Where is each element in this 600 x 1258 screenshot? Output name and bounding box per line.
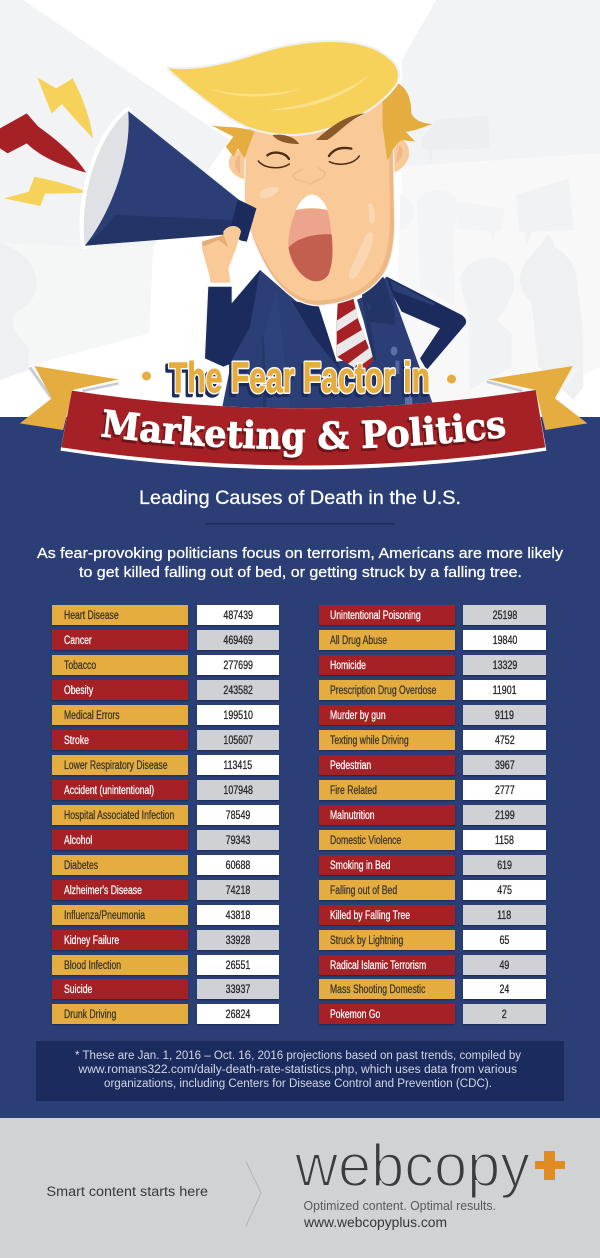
row: Medical Errors: Medical Errors: [64, 710, 120, 722]
row: Smoking in Bed: 619: [497, 860, 512, 872]
row: Kidney Failure: [52, 930, 280, 952]
row: Accident: Accident (unintentional): [64, 785, 154, 797]
row: Drunk Driving: Drunk Driving: [64, 1009, 116, 1021]
row: Homicide: Homicide: [330, 660, 366, 672]
row: Falling out of Bed: 475: [497, 885, 512, 897]
row: Lower Respiratory Disease: 113415: [224, 760, 252, 772]
row: Pokemon Go: 2: [502, 1009, 507, 1021]
right ribbon tail: [487, 366, 587, 430]
row: Influenza/Pneumonia: Influenza/Pneumonia: [64, 910, 145, 922]
footer tagline: Smart content starts here: [46, 1184, 208, 1199]
row: Heart Disease: Heart Disease: [64, 610, 119, 622]
hand gripping megaphone: [202, 226, 241, 287]
row: Texting while Driving: [318, 730, 546, 752]
footnote box: * These are Jan. 1, 2016 – Oct. 16, 2016 projections based on past trends, compiled by: [75, 1050, 521, 1062]
title: Marketing & Politics: Marketing & Politics: [99, 411, 504, 460]
row: Cancer: 469469: [223, 635, 253, 647]
row: Alzheimer's Disease: [52, 880, 280, 902]
row: Alzheimer's Disease: 74218: [226, 885, 250, 897]
footnote box: [36, 1041, 564, 1101]
row: Influenza/Pneumonia: 43818: [226, 910, 250, 922]
row: Killed by Falling Tree: Killed by Falling Tree: [330, 910, 410, 922]
row: Texting while Driving: 4752: [495, 735, 514, 747]
row: Domestic Violence: 1158: [495, 835, 514, 847]
row: Hospital Associated Infection: Hospital Associated Infection: [64, 810, 174, 822]
subtitle: Leading Causes of Death in the U.S.: [139, 488, 461, 509]
row: Smoking in Bed: [318, 855, 546, 876]
footer chevron: [246, 1162, 261, 1226]
face highlights: [368, 203, 375, 224]
row: Diabetes: Diabetes: [64, 860, 98, 872]
row: Kidney Failure: Kidney Failure: [64, 935, 119, 947]
row: Tobacco: Tobacco: [64, 660, 96, 672]
title: The Fear Factor in: The Fear Factor in: [166, 357, 428, 405]
row: Killed by Falling Tree: 118: [497, 910, 512, 922]
row: Accident: 107948: [223, 785, 253, 797]
row: Medical Errors: 199510: [223, 710, 253, 722]
open mouth: [288, 194, 333, 281]
footer panel: [0, 1118, 600, 1258]
left ribbon tail: [20, 366, 119, 430]
decorative title dots: [142, 372, 456, 384]
row: Alcohol: 79343: [226, 835, 250, 847]
row: Pedestrian: 3967: [495, 760, 514, 772]
row: All Drug Abuse: All Drug Abuse: [330, 635, 387, 647]
row: Domestic Violence: [318, 830, 546, 852]
row: Stroke: 105607: [223, 735, 253, 747]
row: Heart Disease: [52, 605, 280, 626]
row: Obesity: Obesity: [64, 685, 93, 697]
row: Obesity: [52, 680, 280, 702]
row: Pedestrian: Pedestrian: [330, 760, 371, 772]
navy panel: [0, 417, 600, 1119]
row: Murder by gun: [318, 705, 546, 726]
icon: lightning bolts: [0, 77, 93, 206]
row: Lower Respiratory Disease: Lower Respiratory Disease: [64, 760, 168, 772]
row: Texting while Driving: Texting while Driving: [330, 735, 409, 747]
row: Pokemon Go: Pokemon Go: [330, 1009, 380, 1021]
row: Blood Infection: Blood Infection: [64, 960, 121, 972]
title: The Fear Factor in: The Fear Factor in: [169, 354, 430, 402]
row: Unintentional Poisoning: Unintentional Poisoning: [330, 610, 421, 622]
footnote box: organizations, including Centers for Disease Control and Prevention (CDC).: [104, 1078, 492, 1090]
row: Unintentional Poisoning: [318, 605, 546, 626]
title: The Fear Factor in: [166, 354, 430, 405]
row: Homicide: 13329: [492, 660, 517, 672]
logo: webcopy plus: webcopy: [294, 1132, 530, 1199]
row: Struck by Lightning: 65: [500, 935, 509, 947]
row: Cancer: [52, 630, 280, 652]
row: Unintentional Poisoning: 25198: [492, 610, 517, 622]
row: Kidney Failure: 33928: [226, 935, 250, 947]
title: Marketing & Politics: Marketing & Politics: [101, 409, 506, 458]
row: Alcohol: [52, 830, 280, 852]
row: Blood Infection: 26551: [226, 960, 250, 972]
row: Prescription Drug Overdose: 11901: [493, 685, 516, 697]
row: Cancer: Cancer: [64, 635, 92, 647]
row: Obesity: 243582: [223, 685, 253, 697]
row: Killed by Falling Tree: [318, 905, 546, 926]
intro paragraph: As fear-provoking politicians focus on terrorism, Americans are more likely: [37, 545, 564, 562]
row: Suicide: Suicide: [64, 984, 92, 996]
row: Smoking in Bed: Smoking in Bed: [330, 860, 390, 872]
hair: [168, 42, 432, 160]
row: Lower Respiratory Disease: [52, 755, 280, 776]
row: Drunk Driving: 26824: [226, 1009, 250, 1021]
row: Diabetes: 60688: [226, 860, 250, 872]
row: Domestic Violence: Domestic Violence: [330, 835, 401, 847]
row: Radical Islamic Terrorism: [318, 955, 546, 976]
row: Homicide: [318, 655, 546, 676]
row: All Drug Abuse: 19840: [492, 635, 517, 647]
row: Alcohol: Alcohol: [64, 835, 92, 847]
row: Murder by gun: 9119: [495, 710, 514, 722]
row: Falling out of Bed: [318, 880, 546, 902]
row: Stroke: [52, 730, 280, 752]
row: Medical Errors: [52, 705, 280, 726]
closed eyes: [258, 148, 359, 168]
row: Tobacco: 277699: [223, 660, 253, 672]
row: Accident: [52, 780, 280, 802]
row: Hospital Associated Infection: 78549: [226, 810, 250, 822]
row: Stroke: Stroke: [64, 735, 89, 747]
crowd silhouettes: [400, 115, 583, 400]
row: Mass Shooting Domestic: Mass Shooting Domestic: [330, 984, 425, 996]
row: All Drug Abuse: [318, 630, 546, 652]
character: suit: [205, 270, 466, 410]
intro paragraph: to get killed falling out of bed, or getting struck by a falling tree.: [79, 564, 522, 581]
row: Drunk Driving: [52, 1004, 280, 1026]
background scene: [0, 0, 600, 420]
row: Malnutrition: 2199: [495, 810, 514, 822]
title: The Fear Factor in: The Fear Factor in: [169, 354, 430, 402]
row: Pedestrian: [318, 755, 546, 776]
row: Pokemon Go: [318, 1004, 546, 1026]
red ribbon: [60, 390, 546, 469]
nose: [293, 167, 325, 184]
row: Falling out of Bed: Falling out of Bed: [330, 885, 397, 897]
row: Radical Islamic Terrorism: Radical Islamic Terrorism: [330, 960, 426, 972]
row: Alzheimer's Disease: Alzheimer's Disease: [64, 885, 142, 897]
character: ears and head: [229, 87, 409, 305]
banner ribbon: [20, 366, 587, 469]
row: Prescription Drug Overdose: [318, 680, 546, 702]
logo tagline: Optimized content. Optimal results.: [304, 1198, 496, 1213]
row: Suicide: 33937: [226, 984, 250, 996]
row: Influenza/Pneumonia: [52, 905, 280, 926]
row: Mass Shooting Domestic: [318, 979, 546, 1000]
row: Mass Shooting Domestic: 24: [500, 984, 509, 996]
eyebrows: [272, 135, 299, 144]
row: Fire Related: 2777: [495, 785, 514, 797]
shirt: [318, 293, 373, 362]
row: Diabetes: [52, 855, 280, 876]
row: Struck by Lightning: [318, 930, 546, 952]
icon: megaphone: [84, 111, 256, 246]
row: Tobacco: [52, 655, 280, 676]
row: Fire Related: [318, 780, 546, 802]
row: Struck by Lightning: Struck by Lightning: [330, 935, 403, 947]
row: Fire Related: Fire Related: [330, 785, 377, 797]
row: Murder by gun: Murder by gun: [330, 710, 386, 722]
row: Malnutrition: Malnutrition: [330, 810, 375, 822]
cheek: [259, 187, 279, 199]
intro paragraph: [37, 545, 564, 581]
row: Blood Infection: [52, 955, 280, 976]
row: Malnutrition: [318, 805, 546, 826]
row: Heart Disease: 487439: [223, 610, 253, 622]
row: Hospital Associated Infection: [52, 805, 280, 826]
footnote box: www.romans322.com/daily-death-rate-statistics.php, which uses data from various: [77, 1064, 517, 1076]
logo url: www.webcopyplus.com: [303, 1215, 447, 1230]
row: Prescription Drug Overdose: Prescription Drug Overdose: [330, 685, 436, 697]
row: Radical Islamic Terrorism: 49: [500, 960, 509, 972]
row: Suicide: [52, 979, 280, 1000]
striped tie: [336, 298, 374, 370]
